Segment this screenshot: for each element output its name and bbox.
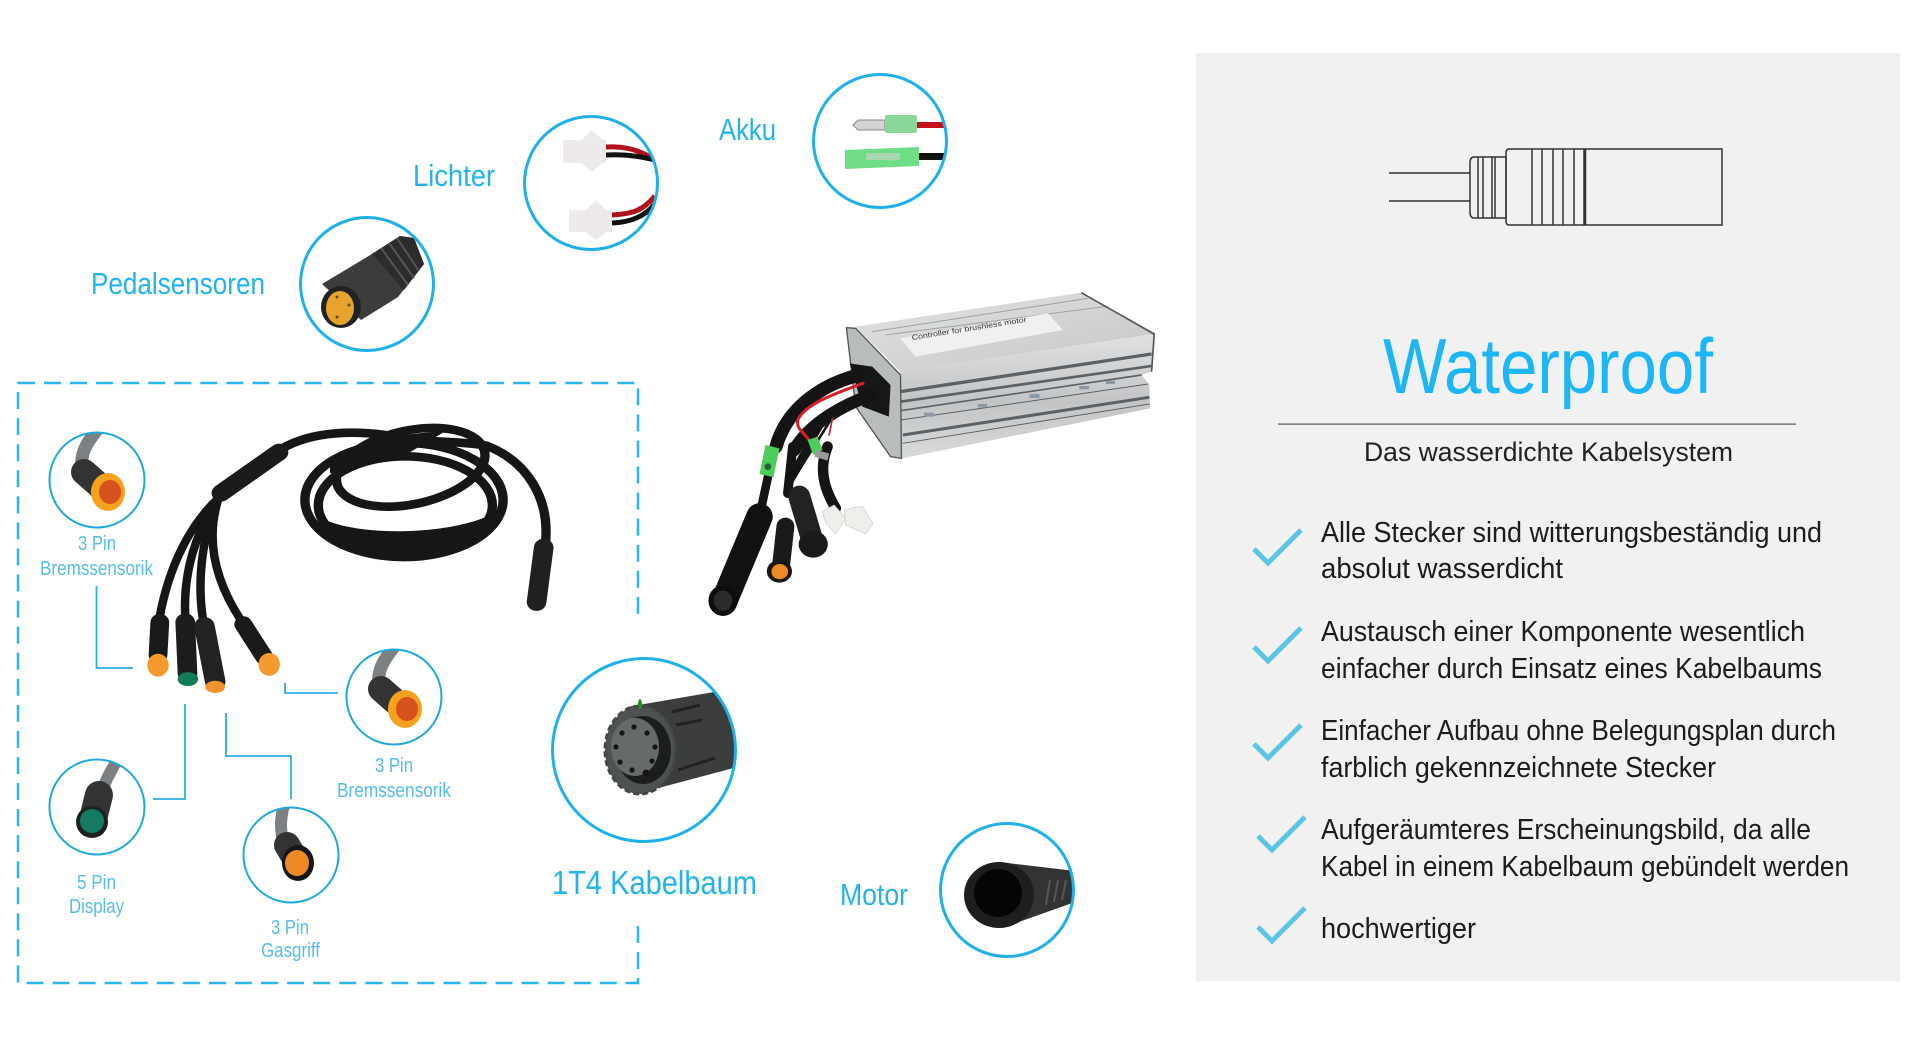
icon: Pedalsensoren connector	[300, 218, 434, 350]
list item 5	[1258, 908, 1476, 945]
controller body: Controller for brushless motor	[911, 315, 1028, 342]
list item 4: Kabel in einem Kabelbaum gebündelt werden	[1321, 851, 1849, 883]
icon: 3 pin throttle connector	[244, 805, 338, 902]
label: Motor: Motor	[840, 877, 908, 912]
icon: 3 pin brake sensor top-left	[50, 430, 144, 528]
label: 3 Pin Gasgriff: 3 Pin	[271, 917, 309, 939]
list item 5: hochwertiger	[1321, 913, 1476, 945]
callout line: display	[153, 704, 185, 799]
controller wires and plugs	[708, 375, 873, 616]
dashed frame: 1T4 Kabelbaum	[18, 383, 638, 983]
label: 1T4 Kabelbaum: 1T4 Kabelbaum	[552, 864, 757, 901]
label: 3 Pin Bremssensorik left	[40, 533, 154, 580]
label: 3 Pin Bremssensorik left: 3 Pin	[78, 533, 116, 555]
label: Akku: Akku	[719, 112, 776, 147]
icon: waterproof connector line drawing	[1389, 149, 1722, 225]
label: 5 Pin Display	[69, 872, 124, 918]
label: Pedalsensoren: Pedalsensoren	[91, 266, 265, 301]
label: 3 Pin Gasgriff: Gasgriff	[261, 940, 320, 962]
label: 3 Pin Bremssensorik right: 3 Pin	[375, 755, 413, 777]
icon: 5 pin display connector	[50, 758, 144, 854]
list item 2	[1254, 616, 1822, 685]
label: 5 Pin Display: 5 Pin	[77, 872, 116, 894]
list item 3	[1254, 715, 1836, 784]
divider	[1278, 424, 1796, 425]
list item 1: absolut wasserdicht	[1321, 553, 1563, 585]
callout line: right brake sensor	[285, 683, 338, 693]
list item 2: Austausch einer Komponente wesentlich	[1321, 616, 1805, 648]
label: 3 Pin Bremssensorik right: Bremssensorik	[337, 780, 452, 802]
controller body	[846, 293, 1154, 458]
icon: 1T4 plug face	[552, 658, 745, 842]
list item 2: einfacher durch Einsatz eines Kabelbaums	[1321, 653, 1822, 685]
list item 3: Einfacher Aufbau ohne Belegungsplan durch	[1321, 715, 1836, 747]
icon: motor connector	[940, 824, 1075, 956]
list item 4: Aufgeräumteres Erscheinungsbild, da alle	[1321, 814, 1811, 846]
icon: Akku connectors	[814, 74, 949, 208]
heading: Waterproof: Waterproof	[1383, 322, 1713, 410]
icon: 3 pin brake sensor right	[346, 647, 442, 744]
callout line: top-left brake sensor	[96, 586, 133, 668]
list item 3: farblich gekennzeichnete Stecker	[1321, 752, 1716, 784]
label: 5 Pin Display: Display	[69, 896, 124, 918]
subheading: Das wasserdichte Kabelsystem	[1364, 437, 1733, 467]
panel: waterproof	[1196, 53, 1900, 981]
callout line: throttle	[226, 713, 291, 799]
icon: Lichter connectors	[524, 116, 658, 250]
image: 1T4 wiring harness	[147, 415, 546, 693]
list item 4	[1258, 814, 1849, 883]
list item 1	[1254, 517, 1822, 585]
label: 3 Pin Bremssensorik right	[337, 755, 452, 802]
label: Lichter: Lichter	[413, 158, 495, 193]
label: 3 Pin Gasgriff	[261, 917, 320, 962]
list item 1: Alle Stecker sind witterungsbeständig und	[1321, 517, 1822, 549]
image: motor controller	[708, 293, 1154, 616]
label: 3 Pin Bremssensorik left: Bremssensorik	[40, 558, 154, 580]
